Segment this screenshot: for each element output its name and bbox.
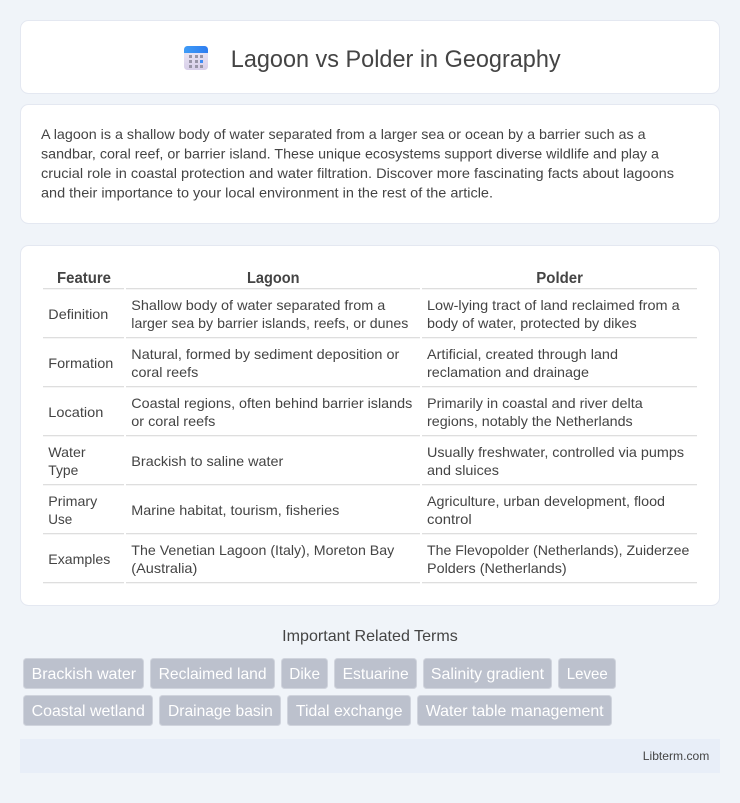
row: primary use: Use <box>48 511 72 527</box>
row: definition: Shallow body of water separated from a <box>131 297 386 313</box>
row: examples <box>48 542 690 576</box>
row: definition: Definition <box>48 306 108 322</box>
row: formation <box>48 346 618 380</box>
tag: Water table management: Water table management <box>426 703 604 720</box>
row: location: regions, notably the Netherlands <box>427 413 633 429</box>
row: definition: Low-lying tract of land reclaimed from a <box>427 297 680 313</box>
tag: Dike: Dike <box>289 666 320 683</box>
table header row: Feature <box>57 270 111 287</box>
tag: Reclaimed land: Reclaimed land <box>159 666 267 683</box>
row: formation: Formation <box>48 355 113 371</box>
title: Lagoon vs Polder in Geography <box>231 46 561 73</box>
row: primary use: Marine habitat, tourism, fisheries <box>131 502 339 518</box>
row: location: Location <box>48 404 103 420</box>
row: formation: Natural, formed by sediment deposition or <box>131 346 400 362</box>
tag: Drainage basin: Drainage basin <box>168 703 273 720</box>
tag: Tidal exchange: Tidal exchange <box>296 703 403 720</box>
tag: Dike <box>282 658 328 688</box>
tag: Estuarine <box>334 658 416 688</box>
tag: Water table management <box>418 696 612 726</box>
table header row <box>57 270 583 287</box>
tag: Coastal wetland: Coastal wetland <box>32 703 145 720</box>
row: primary use: control <box>427 511 472 527</box>
row: location: or coral reefs <box>131 413 215 429</box>
row: definition: larger sea by barrier islands, reefs, or dunes <box>131 315 408 331</box>
footer <box>20 739 720 773</box>
tag: Drainage basin <box>160 696 280 726</box>
intro paragraph: crucial role in coastal protection and water filtration. Discover more fascinating facts about lagoons <box>41 165 674 181</box>
row: primary use <box>48 493 665 527</box>
row: definition <box>48 297 680 331</box>
intro paragraph: sandbar, coral reef, or barrier island. These unique ecosystems support diverse wildlife and play a <box>41 146 659 162</box>
row: examples: Polders (Netherlands) <box>427 560 567 576</box>
intro card <box>20 104 720 224</box>
row: formation: Artificial, created through land <box>427 346 618 362</box>
tag: Reclaimed land <box>150 658 274 688</box>
row: water type: Type <box>48 462 79 478</box>
row: water type <box>48 444 684 478</box>
tag: Coastal wetland <box>24 696 152 726</box>
row: formation: coral reefs <box>131 364 198 380</box>
row: water type: and sluices <box>427 462 499 478</box>
tag: Salinity gradient <box>424 658 552 688</box>
row: location: Coastal regions, often behind barrier islands <box>131 395 412 411</box>
intro paragraph: A lagoon is a shallow body of water separated from a larger sea or ocean by a barrier such as a <box>41 126 646 142</box>
tag: Tidal exchange <box>288 696 410 726</box>
table header row: Polder <box>536 270 583 287</box>
row: water type: Water <box>48 444 86 460</box>
footer credit: Libterm.com <box>643 749 709 763</box>
row: definition: body of water, protected by dikes <box>427 315 637 331</box>
comparison table card <box>20 246 720 606</box>
intro paragraph <box>41 126 674 200</box>
row: examples: (Australia) <box>131 560 197 576</box>
tag: Levee <box>558 658 616 688</box>
related terms heading: Important Related Terms <box>282 628 458 645</box>
row: examples: Examples <box>48 551 110 567</box>
tag: Estuarine: Estuarine <box>343 666 409 683</box>
tag: Salinity gradient: Salinity gradient <box>431 666 545 683</box>
table header row: Lagoon <box>247 270 300 287</box>
row: primary use: Agriculture, urban development, flood <box>427 493 665 509</box>
row: water type: Brackish to saline water <box>131 453 284 469</box>
row: formation: reclamation and drainage <box>427 364 589 380</box>
row: examples: The Venetian Lagoon (Italy), Moreton Bay <box>131 542 394 558</box>
row: water type: Usually freshwater, controlled via pumps <box>427 444 684 460</box>
intro paragraph: and their importance to your local environment in the rest of the article. <box>41 184 493 200</box>
icon: calendar <box>184 46 208 70</box>
row: location: Primarily in coastal and river delta <box>427 395 643 411</box>
row: primary use: Primary <box>48 493 97 509</box>
tag: Brackish water: Brackish water <box>32 666 137 683</box>
header card <box>20 20 720 94</box>
tag: Brackish water <box>24 658 144 688</box>
related terms tags <box>24 658 616 726</box>
row: location <box>48 395 643 429</box>
tag: Levee: Levee <box>567 666 608 683</box>
row: examples: The Flevopolder (Netherlands), Zuiderzee <box>427 542 690 558</box>
